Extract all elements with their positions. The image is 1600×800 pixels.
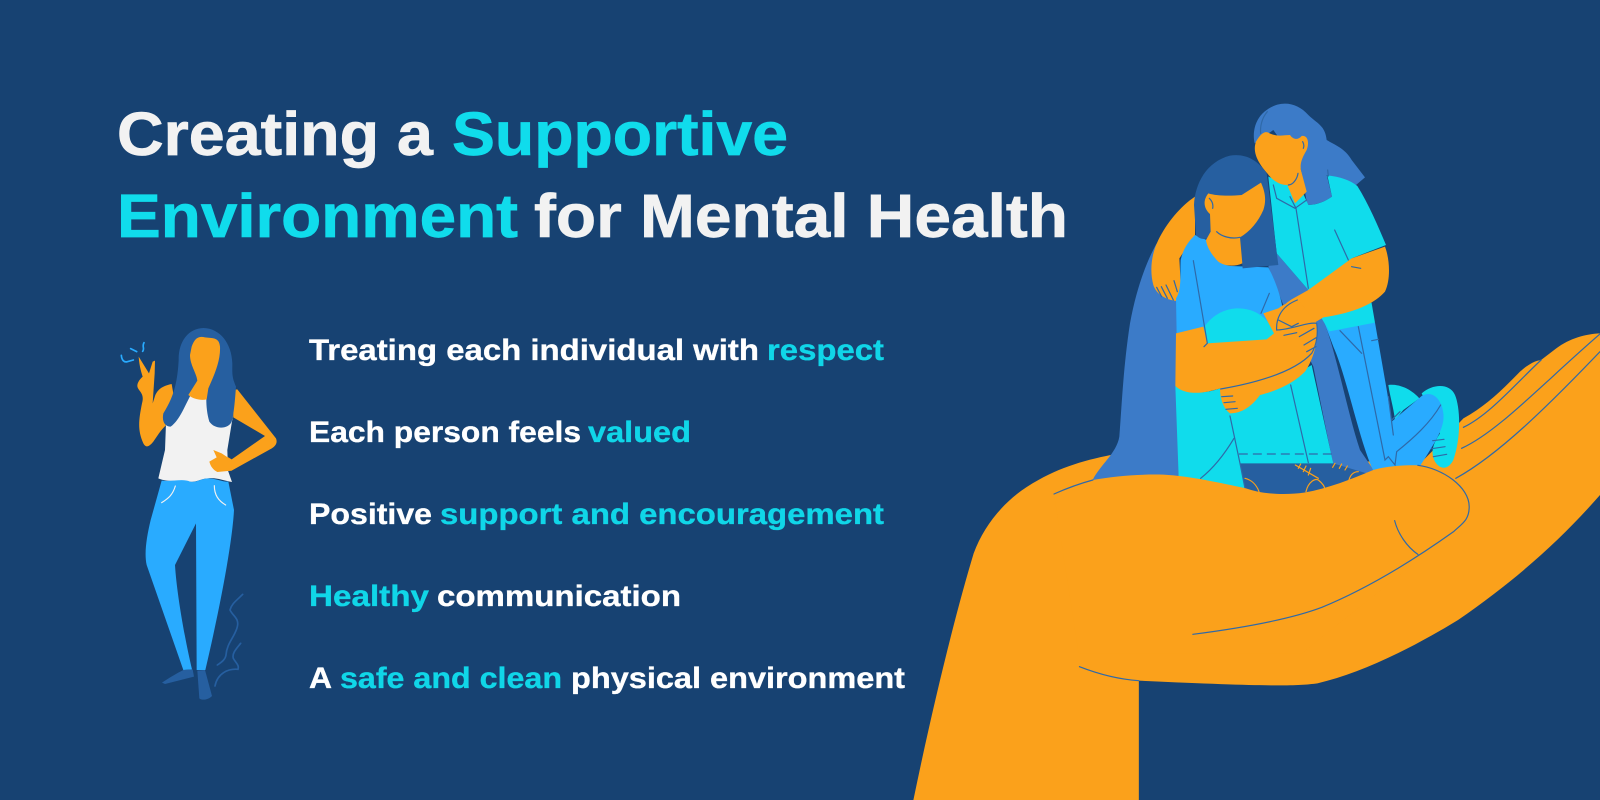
illustration: two women held in a giant hand — [913, 104, 1600, 800]
list item 3: support and encouragement — [440, 498, 884, 531]
list item 5: physical environment — [571, 662, 905, 695]
hand: palm and fingers — [913, 333, 1600, 800]
list item 5 — [309, 662, 905, 695]
list item 4: Healthy — [309, 580, 429, 613]
list item 4: communication — [437, 580, 681, 613]
title: Environment — [117, 182, 518, 250]
icon: woman gesturing with hand on hip — [121, 328, 277, 700]
hand: thumb over the figures — [1054, 465, 1469, 681]
list item 3: Positive — [309, 498, 432, 531]
title: Creating a — [117, 100, 434, 168]
list item 1: Treating each individual with — [309, 334, 759, 367]
woman sitting in front hugging her knees — [1175, 155, 1367, 498]
woman standing behind — [1093, 104, 1459, 480]
title: Supportive — [452, 100, 788, 168]
list item 2 — [309, 416, 691, 449]
title — [117, 100, 1068, 250]
list item 2: Each person feels — [309, 416, 581, 449]
list item 4 — [309, 580, 681, 613]
list item 5: A — [309, 662, 332, 695]
list item 2: valued — [588, 416, 691, 449]
list item 1: respect — [767, 334, 884, 367]
list item 5: safe and clean — [340, 662, 562, 695]
list of supportive factors — [309, 334, 905, 695]
title: for Mental Health — [534, 182, 1068, 250]
